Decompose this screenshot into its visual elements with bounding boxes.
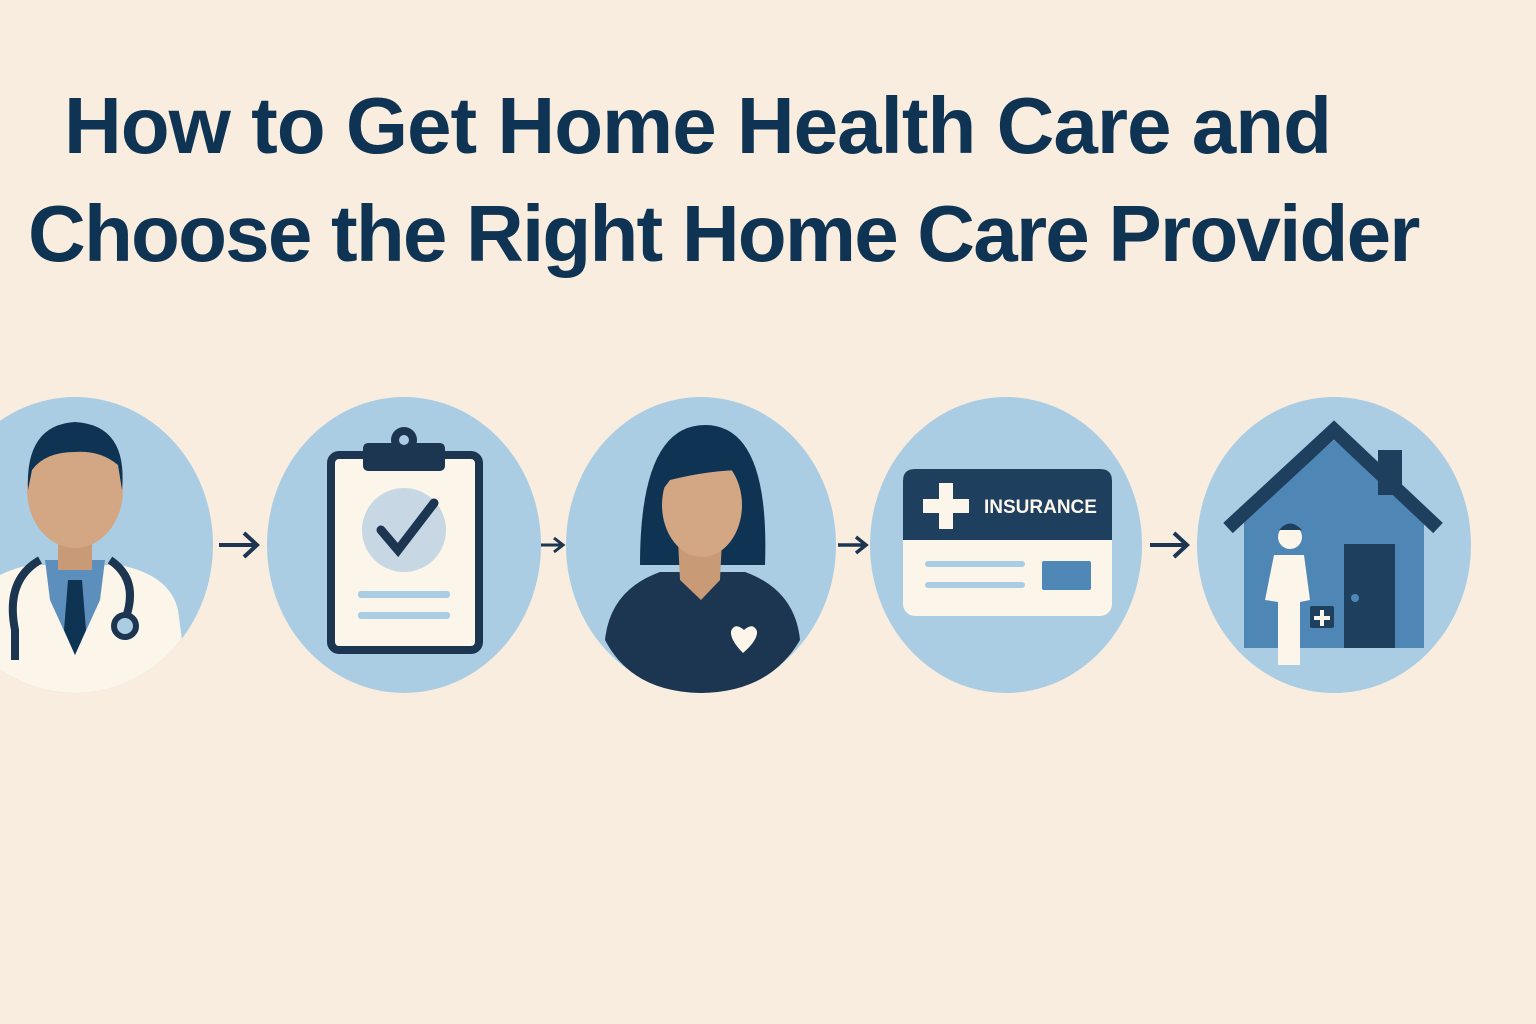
arrow 3 bbox=[838, 537, 866, 553]
step 1: doctor bbox=[0, 397, 213, 700]
step 4: insurance card bbox=[870, 397, 1142, 693]
step 4: insurance card: INSURANCE bbox=[984, 497, 1097, 518]
step 5: house with nurse bbox=[1197, 397, 1471, 693]
title line 2: Choose the Right Home Care Provider bbox=[28, 189, 1419, 278]
title line 1: How to Get Home Health Care and bbox=[64, 81, 1331, 170]
arrow 2 bbox=[541, 538, 563, 552]
process flow bbox=[0, 397, 1471, 693]
arrow 4 bbox=[1150, 533, 1187, 557]
step 2: clipboard bbox=[267, 397, 541, 693]
arrow 1 bbox=[219, 533, 257, 557]
title bbox=[28, 81, 1420, 278]
step 3: caregiver bbox=[566, 397, 836, 693]
